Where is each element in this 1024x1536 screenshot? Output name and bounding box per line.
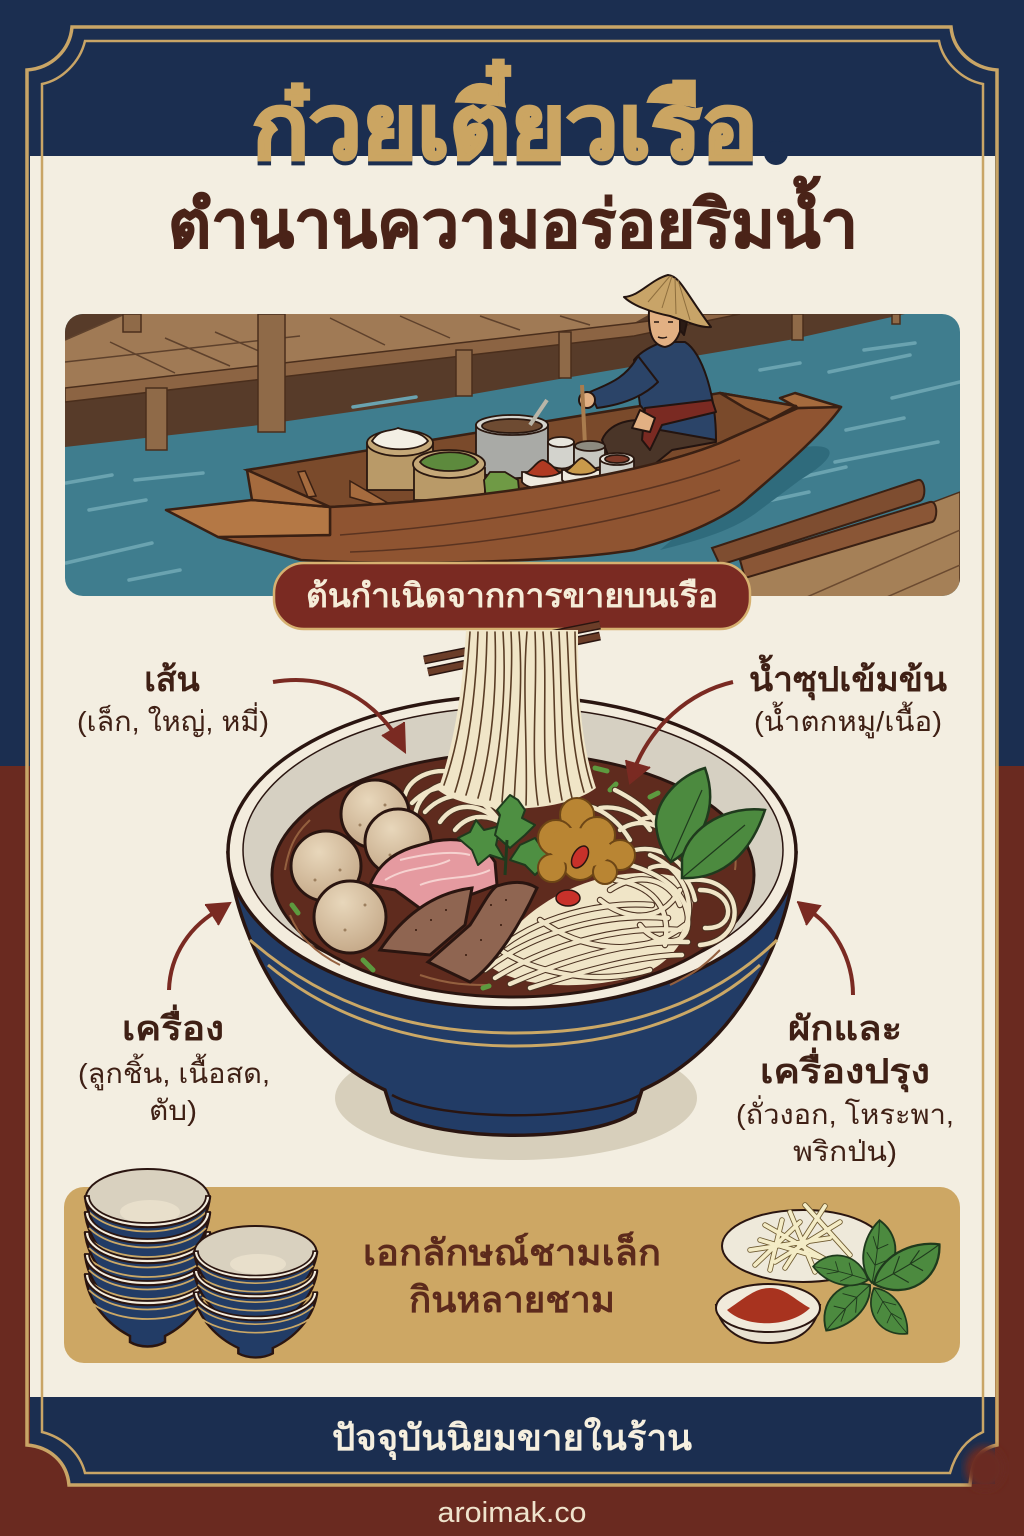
bowl interior (243, 707, 783, 993)
arm (590, 356, 658, 408)
bowl body (228, 853, 796, 1135)
arrow: vegetables and seasoning (797, 902, 853, 995)
underside of pier (65, 314, 905, 447)
title: ก๋วยเตี๋ยวเรือ (252, 60, 758, 178)
paddle (582, 385, 585, 445)
label: vegetables and seasoning: ผักและ (788, 1010, 902, 1048)
icon: ground chili bowl (716, 1284, 820, 1343)
heading: eat many bowls: กินหลายชาม (409, 1279, 615, 1320)
sliced pork (370, 840, 497, 912)
gold stripes (250, 940, 777, 1033)
yellow spice bowl (562, 470, 600, 485)
sash (642, 400, 716, 450)
boat hull planks (340, 460, 740, 552)
hair (680, 312, 688, 335)
label: vegetables and seasoning: เครื่องปรุง (760, 1047, 930, 1093)
label: noodles: เส้น (144, 661, 200, 699)
cilantro (458, 795, 557, 875)
hat (624, 275, 711, 327)
deck planks (65, 314, 590, 373)
boat shadow (660, 446, 830, 550)
fried topping (538, 798, 635, 884)
bowl shadow (335, 1036, 697, 1160)
label: meat toppings: ตับ) (149, 1095, 197, 1126)
chopsticks (424, 625, 600, 672)
meatballs (291, 780, 431, 953)
bowl rim (228, 696, 796, 1008)
eyes and mouth (654, 322, 673, 338)
arrow: soup (626, 682, 733, 783)
panel: boat scene (65, 275, 960, 600)
label: meat toppings (78, 1004, 270, 1126)
rice bucket (367, 443, 433, 490)
label: meat toppings: เครื่อง (122, 1004, 224, 1048)
arrow: meat toppings (169, 903, 230, 990)
water (65, 314, 960, 596)
label: vegetables and seasoning: (ถั่วงอก, โหระพา, (736, 1095, 954, 1130)
label: vegetables and seasoning: พริกป่น) (793, 1136, 897, 1167)
smudge at bottom right (965, 1446, 1005, 1490)
origin banner: ต้นกำเนิดจากการขายบนเรือ (306, 577, 718, 614)
bowl foot line (392, 1095, 640, 1115)
arrow: noodles (273, 680, 405, 752)
greens bucket (414, 468, 485, 500)
water ripples (66, 343, 960, 580)
label: soup (749, 654, 947, 739)
label: noodles: (เล็ก, ใหญ่, หมี่) (77, 702, 269, 737)
liver slices (380, 882, 537, 982)
title smudge dot (764, 141, 788, 165)
label: vegetables and seasoning (736, 1010, 954, 1167)
boat hull and stern (166, 393, 841, 563)
vendor man (579, 275, 716, 472)
label: soup: น้ำซุปเข้มข้น (749, 654, 947, 701)
pier beam (65, 314, 740, 402)
hat lines (648, 276, 690, 320)
red chili bowl (522, 472, 565, 489)
subtitle: ตำนานความอร่อยริมน้ำ (168, 175, 858, 261)
hand on paddle (579, 392, 595, 408)
soup streaks and green onion (285, 768, 736, 988)
hand on knee (632, 410, 655, 432)
icon: short stack of bowls (194, 1226, 317, 1357)
ladle (530, 400, 547, 425)
label: noodles (77, 661, 269, 737)
soup pot (476, 425, 548, 478)
trousers (602, 420, 716, 472)
panel: navy footer band (30, 1397, 995, 1484)
cups (548, 442, 574, 468)
icon: basil sprig (812, 1219, 946, 1341)
boat seat and dividers (298, 471, 405, 513)
label: soup: (น้ำตกหมู/เนื้อ) (754, 701, 942, 739)
lifted noodles (438, 630, 596, 809)
origin banner (274, 563, 750, 629)
panel: small bowl feature (64, 1169, 960, 1363)
footer text: ปัจจุบันนิยมขายในร้าน (332, 1416, 692, 1461)
logs (712, 480, 924, 565)
main noodle bowl (228, 625, 796, 1135)
label: meat toppings: (ลูกชิ้น, เนื้อสด, (78, 1053, 270, 1091)
pier posts (123, 314, 900, 450)
sauce bowl (600, 460, 634, 481)
icon: bean sprouts plate (722, 1205, 884, 1282)
boat interior (247, 393, 796, 507)
noodle nest (405, 771, 735, 988)
dock at bottom right (748, 491, 960, 596)
neck and face (649, 310, 683, 347)
basil leaves (656, 768, 765, 878)
panel: cream paper background (30, 156, 995, 1397)
icon: tall stack of bowls (85, 1169, 210, 1346)
chopstick wood (424, 625, 600, 672)
website: aroimak.co (438, 1497, 586, 1529)
meatball specks (314, 804, 412, 932)
torso (634, 342, 716, 440)
soup (272, 753, 754, 997)
chilies (556, 843, 592, 906)
heading: small bowls: เอกลักษณ์ชามเล็ก (363, 1230, 661, 1273)
boat food items (367, 400, 634, 500)
pier deck (65, 314, 650, 388)
greens (484, 472, 520, 500)
